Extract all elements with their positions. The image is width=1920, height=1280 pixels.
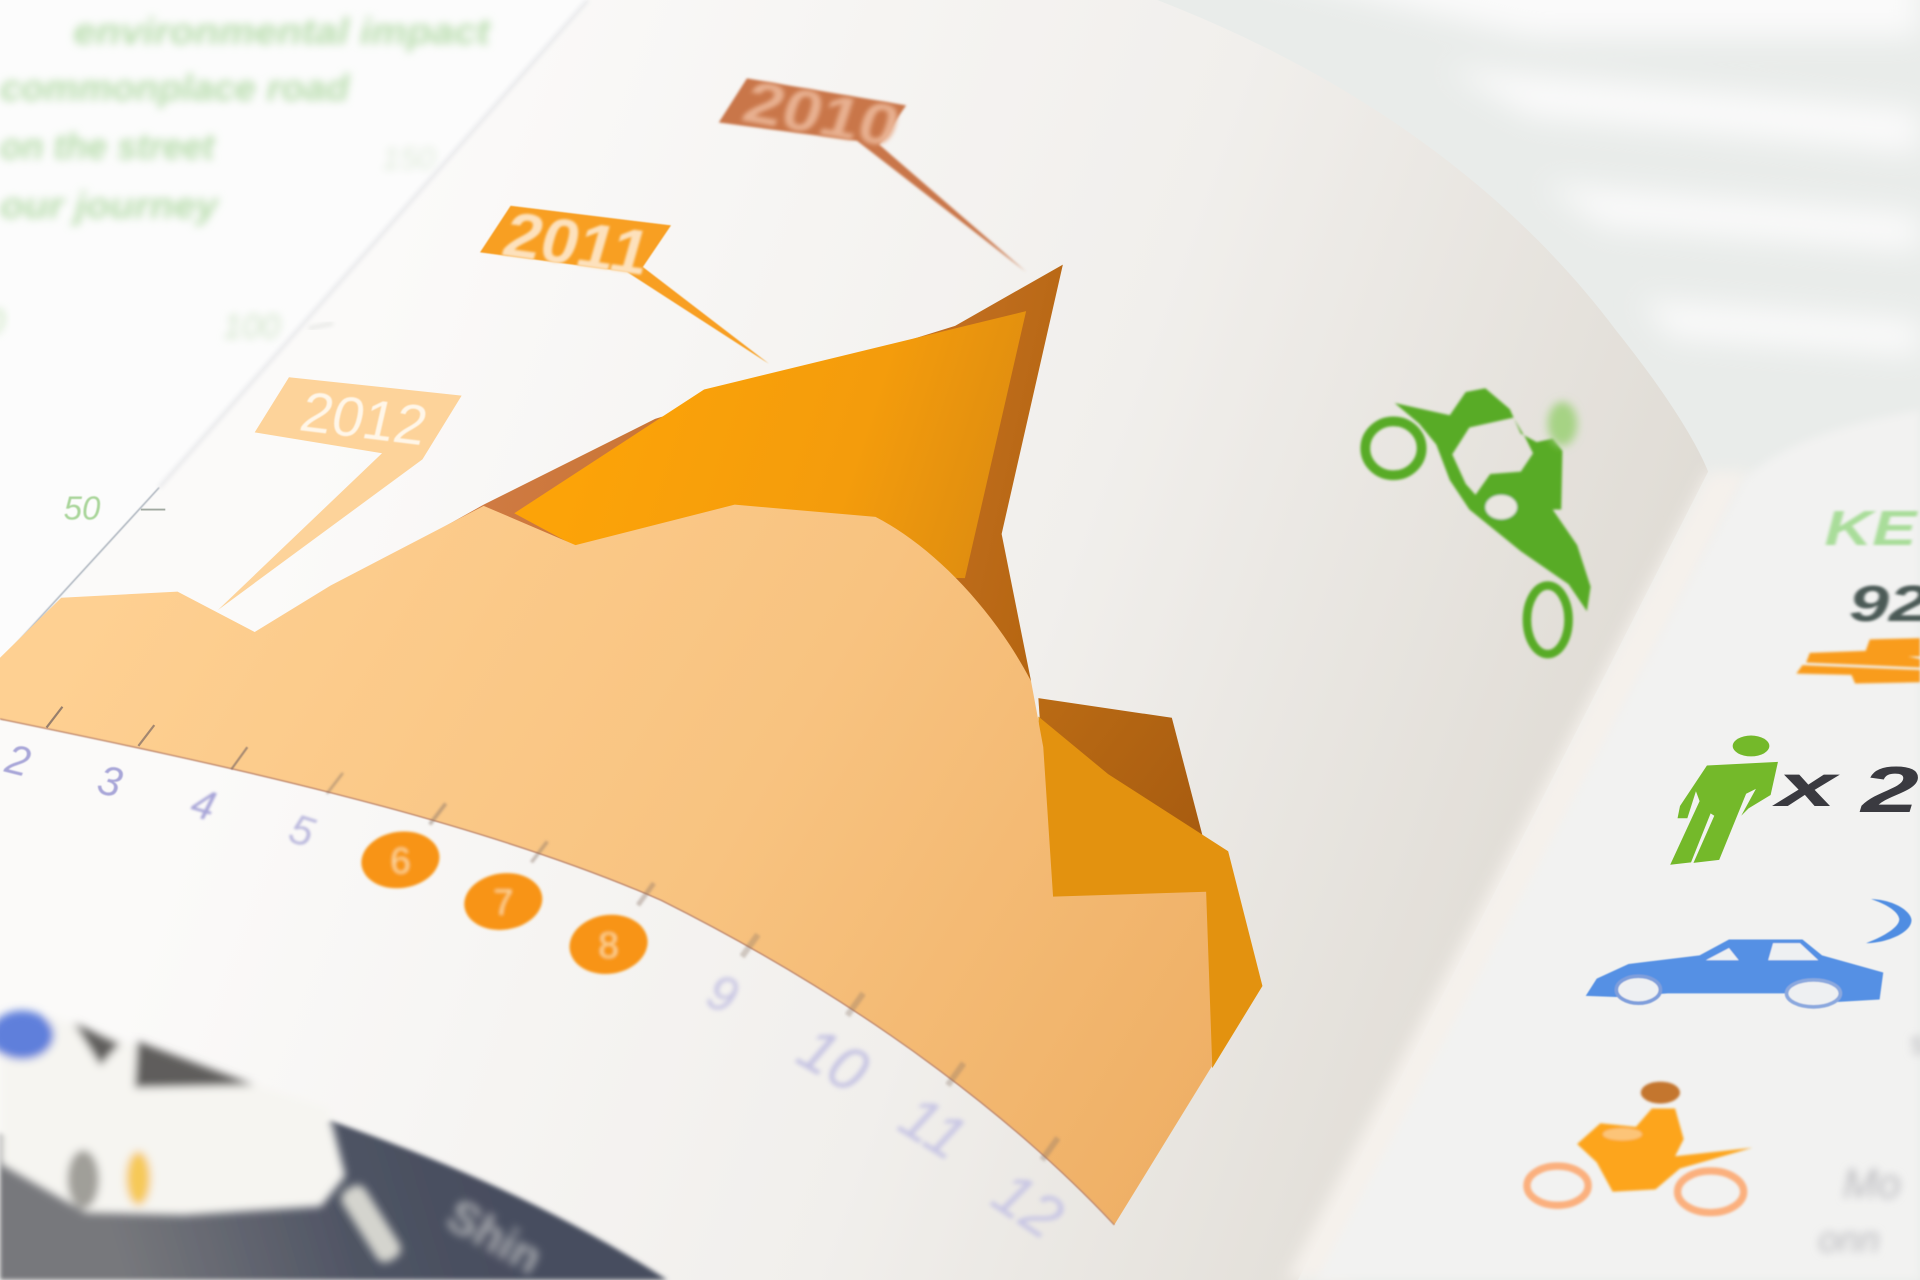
icon: orange speed lines (1796, 638, 1920, 683)
highlighted month 6 (358, 827, 443, 893)
left facing page with blurred text: 100 (223, 308, 280, 346)
flag 2012 (218, 377, 462, 610)
flag 2010 (719, 69, 1026, 272)
icon: green scooter rider (1365, 388, 1591, 654)
highlighted month 7: 7 (493, 882, 513, 923)
left facing page with blurred text: environmental impact (73, 11, 492, 52)
left facing page with blurred text: our journey (0, 185, 220, 226)
month numbers: 12 (981, 1158, 1075, 1252)
icon: blue crescent moon (1866, 899, 1911, 943)
left facing page with blurred text: commonplace road (0, 67, 351, 108)
multiplier x 2 (1772, 753, 1919, 826)
icon: white car (0, 1011, 345, 1215)
left facing page with blurred text (0, 0, 588, 668)
axis tick 100 (309, 323, 333, 328)
axis label 50: 50 (64, 490, 101, 527)
month numbers: 11 (888, 1082, 978, 1173)
small legend text (1818, 1024, 1920, 1260)
flag 2012: 2012 (295, 380, 433, 457)
lower month axis curve (0, 719, 1114, 1225)
month numbers: 5 (284, 804, 321, 856)
right facing page (1316, 410, 1920, 1280)
icon: orange motorcycle rider (1527, 1082, 1752, 1213)
vertical axis line (0, 0, 588, 661)
month numbers: 2 (0, 734, 35, 786)
icon: blue car (1586, 939, 1883, 1007)
month numbers: 10 (787, 1013, 880, 1106)
month numbers: 9 (700, 964, 745, 1025)
highlighted month 7 (461, 868, 546, 935)
small legend text: onn (1818, 1219, 1880, 1260)
highlighted month 8: 8 (598, 925, 619, 966)
month numbers: 4 (186, 778, 221, 830)
axis label 50 (64, 490, 165, 527)
month axis ticks (47, 707, 1058, 1160)
area series 2012 front layer (0, 505, 1212, 1225)
area series 2010 back layer (331, 265, 1202, 835)
flag 2010: 2010 (736, 69, 908, 159)
icon: green person (1670, 736, 1778, 865)
month numbers (0, 734, 1075, 1252)
left facing page with blurred text: 150 (382, 140, 435, 176)
dark road band with white car (0, 1011, 667, 1280)
legend heading KE: KE (1824, 501, 1919, 556)
multiplier x 2: x (1772, 753, 1840, 819)
month numbers: 3 (93, 755, 127, 806)
area series 2011 middle layer (514, 311, 1262, 1068)
flag 2011: 2011 (496, 199, 659, 288)
left facing page with blurred text: on the street (0, 126, 216, 167)
highlighted month 8 (566, 910, 651, 979)
highlighted month 6: 6 (390, 840, 411, 881)
multiplier x 2: 2 (1859, 754, 1919, 826)
small legend text: Mo (1843, 1160, 1901, 1207)
page fold highlight (1286, 472, 1751, 1280)
flag 2011 (480, 199, 769, 364)
